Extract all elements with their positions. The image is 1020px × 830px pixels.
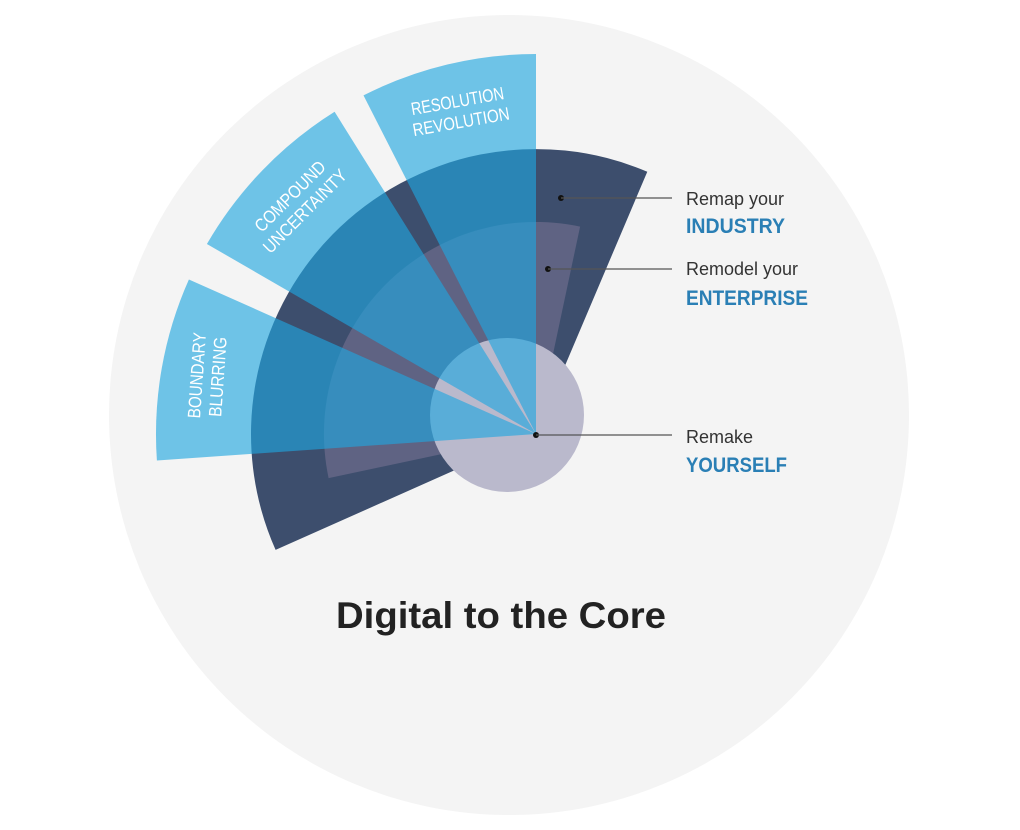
callout: industry: Remap your: [686, 189, 784, 209]
title: Digital to the Core: [336, 595, 666, 636]
wedge: resolution revolution: [364, 54, 536, 434]
callout: enterprise: [545, 259, 808, 310]
sector: industry (navy): [251, 149, 647, 550]
callout: yourself: YOURSELF: [686, 454, 787, 477]
callout: yourself: Remake: [686, 427, 753, 447]
sector: enterprise (purple): [324, 222, 580, 478]
wedge: compound uncertainty: [207, 112, 536, 434]
label: resolution revolution: RESOLUTION: [409, 83, 505, 119]
callout: industry: INDUSTRY: [686, 215, 785, 238]
label: boundary blurring: BOUNDARY: [184, 332, 210, 419]
background circle: [109, 15, 909, 815]
callout: industry: [558, 189, 785, 238]
label: boundary blurring: BLURRING: [205, 336, 231, 417]
fan diagram: [156, 54, 647, 550]
wedge: boundary blurring: [156, 280, 536, 460]
callout: yourself: [533, 427, 787, 477]
callout: enterprise: ENTERPRISE: [686, 287, 808, 310]
label: boundary blurring: [184, 332, 231, 420]
inner circle: yourself: [430, 338, 584, 492]
label: compound uncertainty: COMPOUND: [251, 157, 330, 236]
label: resolution revolution: [407, 83, 511, 140]
callout: enterprise: Remodel your: [686, 259, 798, 279]
label: compound uncertainty: UNCERTAINTY: [259, 165, 351, 257]
label: resolution revolution: REVOLUTION: [411, 103, 511, 140]
